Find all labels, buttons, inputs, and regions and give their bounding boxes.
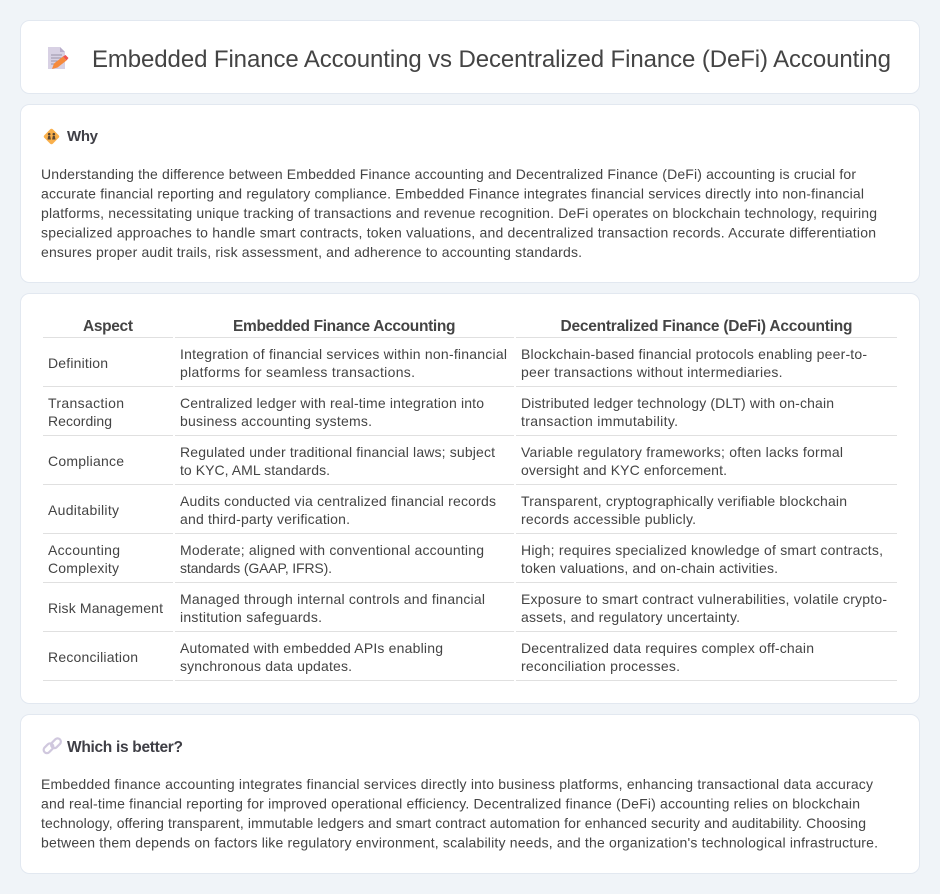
heading: why: Why: [67, 128, 99, 145]
row: compliance: to KYC, AML standards.: [180, 462, 330, 478]
heading: which is better: Which is better?: [67, 739, 183, 756]
row: risk management: Managed through internal controls and financial: [180, 591, 485, 607]
text block: which is better paragraph: between them depends on factors like regulatory environment, scalability needs, and the organization's technological infrastructure.: [41, 834, 878, 850]
panel: why: [20, 104, 920, 282]
row: auditability: records accessible publicly.: [521, 511, 696, 527]
row: risk management: [48, 591, 887, 625]
table header: Aspect: [83, 318, 133, 335]
row: reconciliation: [48, 640, 814, 674]
panel: title header: [20, 20, 920, 94]
text block: which is better paragraph: and real-time financial reporting for improved operational efficiency. Decentralized finance (DeFi) accounting relies on blockchain: [41, 796, 860, 812]
row: definition: [48, 346, 867, 380]
row: definition: Integration of financial services within non-financial: [180, 346, 507, 362]
text block: why paragraph: Understanding the difference between Embedded Finance accounting and Decentralized Finance (DeFi) accounting is crucial for: [41, 166, 856, 182]
row: risk management: Risk Management: [48, 600, 163, 616]
row: compliance: oversight and KYC enforcement.: [521, 462, 727, 478]
row: transaction recording: Recording: [48, 413, 112, 429]
row: accounting complexity: standards (GAAP, IFRS).: [180, 560, 332, 576]
text block: which is better paragraph: Embedded finance accounting integrates financial services directly into business platforms, enhancing transactional data accuracy: [41, 776, 873, 792]
text block: why paragraph: accurate financial reporting and regulatory compliance. Embedded Finance integrates financial services directly into non-financial: [41, 186, 864, 202]
row: reconciliation: Decentralized data requires complex off-chain: [521, 640, 814, 656]
row: transaction recording: [48, 395, 834, 429]
row: transaction recording: business accounting systems.: [180, 413, 372, 429]
row: definition: Definition: [48, 355, 108, 371]
row: transaction recording: Distributed ledger technology (DLT) with on-chain: [521, 395, 834, 411]
row: compliance: [48, 444, 843, 478]
icon: link: [42, 737, 62, 754]
table header: Embedded Finance Accounting: [233, 318, 456, 335]
row: transaction recording: transaction immutability.: [521, 413, 678, 429]
row: auditability: and third-party verification.: [180, 511, 350, 527]
row: transaction recording: Centralized ledger with real-time integration into: [180, 395, 484, 411]
row: accounting complexity: High; requires specialized knowledge of smart contracts,: [521, 542, 883, 558]
text block: why paragraph: specialized approaches to handle smart contracts, token valuations, and decentralized transaction records. Accurate differentiation: [41, 224, 876, 240]
row: risk management: assets, and regulatory uncertainty.: [521, 609, 740, 625]
row: accounting complexity: token valuations, and on-chain activities.: [521, 560, 778, 576]
icon: document with pencil: [48, 47, 68, 69]
row: definition: Blockchain-based financial protocols enabling peer-to-: [521, 346, 867, 362]
text block: which is better paragraph: [41, 776, 878, 850]
row: auditability: [48, 493, 847, 527]
row: accounting complexity: Complexity: [48, 560, 119, 576]
row: reconciliation: Automated with embedded APIs enabling: [180, 640, 443, 656]
row: definition: peer transactions without intermediaries.: [521, 364, 782, 380]
table header: Decentralized Finance (DeFi) Accounting: [560, 318, 852, 335]
row: auditability: Transparent, cryptographically verifiable blockchain: [521, 493, 847, 509]
text block: why paragraph: platforms, necessitating unique tracking of transactions and revenue recognition. DeFi operates on blockchain technology, requiring: [41, 205, 877, 221]
text block: which is better paragraph: technology, offering transparent, immutable ledgers and smart contract automation for enhanced security and auditability. Choosing: [41, 815, 866, 831]
row: auditability: Audits conducted via centralized financial records: [180, 493, 496, 509]
row: auditability: Auditability: [48, 502, 119, 518]
row: reconciliation: Reconciliation: [48, 649, 138, 665]
row: risk management: institution safeguards.: [180, 609, 322, 625]
title: Embedded Finance Accounting vs Decentralized Finance (DeFi) Accounting: [92, 46, 891, 73]
icon: diamond: [43, 128, 60, 145]
row: compliance: Regulated under traditional financial laws; subject: [180, 444, 495, 460]
row: accounting complexity: [48, 542, 883, 576]
row: compliance: Compliance: [48, 453, 124, 469]
row: risk management: Exposure to smart contract vulnerabilities, volatile crypto-: [521, 591, 887, 607]
row: transaction recording: Transaction: [48, 395, 124, 411]
row: definition: platforms for seamless transactions.: [180, 364, 415, 380]
row: accounting complexity: Accounting: [48, 542, 120, 558]
text block: why paragraph: ensures proper audit trails, risk assessment, and adherence to accounting standards.: [41, 244, 582, 260]
row: reconciliation: reconciliation processes.: [521, 658, 680, 674]
row: reconciliation: synchronous data updates.: [180, 658, 352, 674]
panel: comparison table: [20, 294, 920, 704]
row: accounting complexity: Moderate; aligned with conventional accounting: [180, 542, 484, 558]
panel: which is better: [20, 714, 920, 874]
row: compliance: Variable regulatory frameworks; often lacks formal: [521, 444, 843, 460]
text block: why paragraph: [41, 166, 877, 260]
table header: [83, 318, 852, 335]
